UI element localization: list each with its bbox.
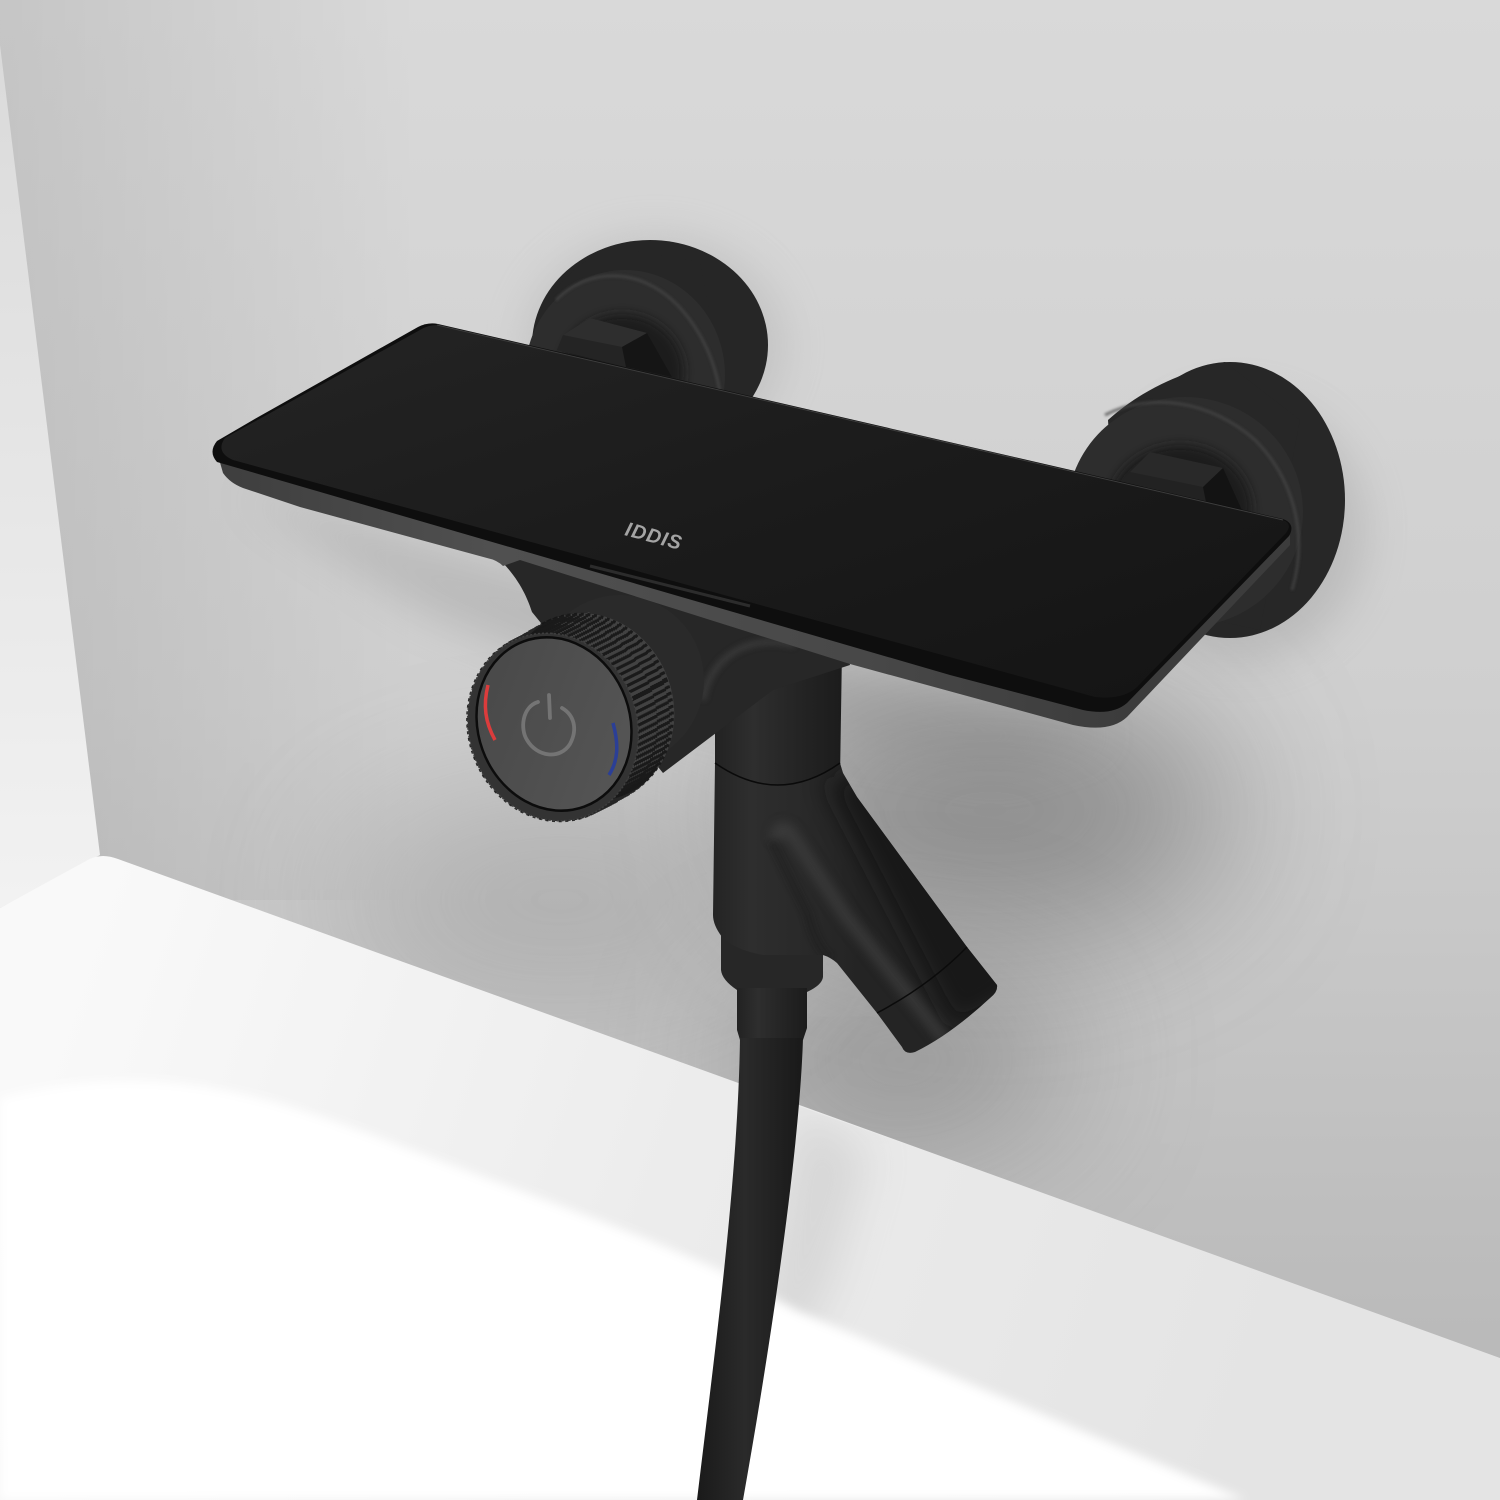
hex nut bbox=[557, 318, 672, 377]
power icon bbox=[523, 695, 574, 755]
temperature knob bbox=[442, 589, 700, 845]
hose shadow on rim bbox=[776, 1118, 866, 1314]
hex nut bbox=[1117, 452, 1245, 517]
mixer body with spout bbox=[713, 762, 998, 1053]
right wall rosette bbox=[1067, 362, 1345, 638]
knob rim bbox=[442, 609, 664, 845]
column above spout bbox=[715, 650, 842, 798]
knob housing and bracket bbox=[495, 530, 850, 773]
logo: IDDIS bbox=[623, 519, 685, 555]
left wall rosette bbox=[525, 240, 768, 480]
shelf underside strip bbox=[217, 340, 1290, 728]
knurled band bbox=[442, 589, 700, 845]
shower hose bbox=[697, 1038, 803, 1500]
spout tip seam bbox=[877, 947, 967, 1013]
knob collar bbox=[536, 595, 704, 765]
hot marker bbox=[485, 685, 495, 740]
bathtub basin bbox=[0, 1081, 1246, 1500]
knob face bbox=[452, 615, 656, 833]
hose connector nut bbox=[721, 925, 823, 1040]
side wall bbox=[0, 45, 100, 908]
bathtub rim bbox=[0, 856, 1500, 1500]
cold marker bbox=[609, 723, 617, 775]
shelf glass edge bbox=[212, 323, 1291, 712]
glass shelf top bbox=[221, 325, 1289, 698]
wall shadow cast by mixer bbox=[240, 237, 1365, 1150]
